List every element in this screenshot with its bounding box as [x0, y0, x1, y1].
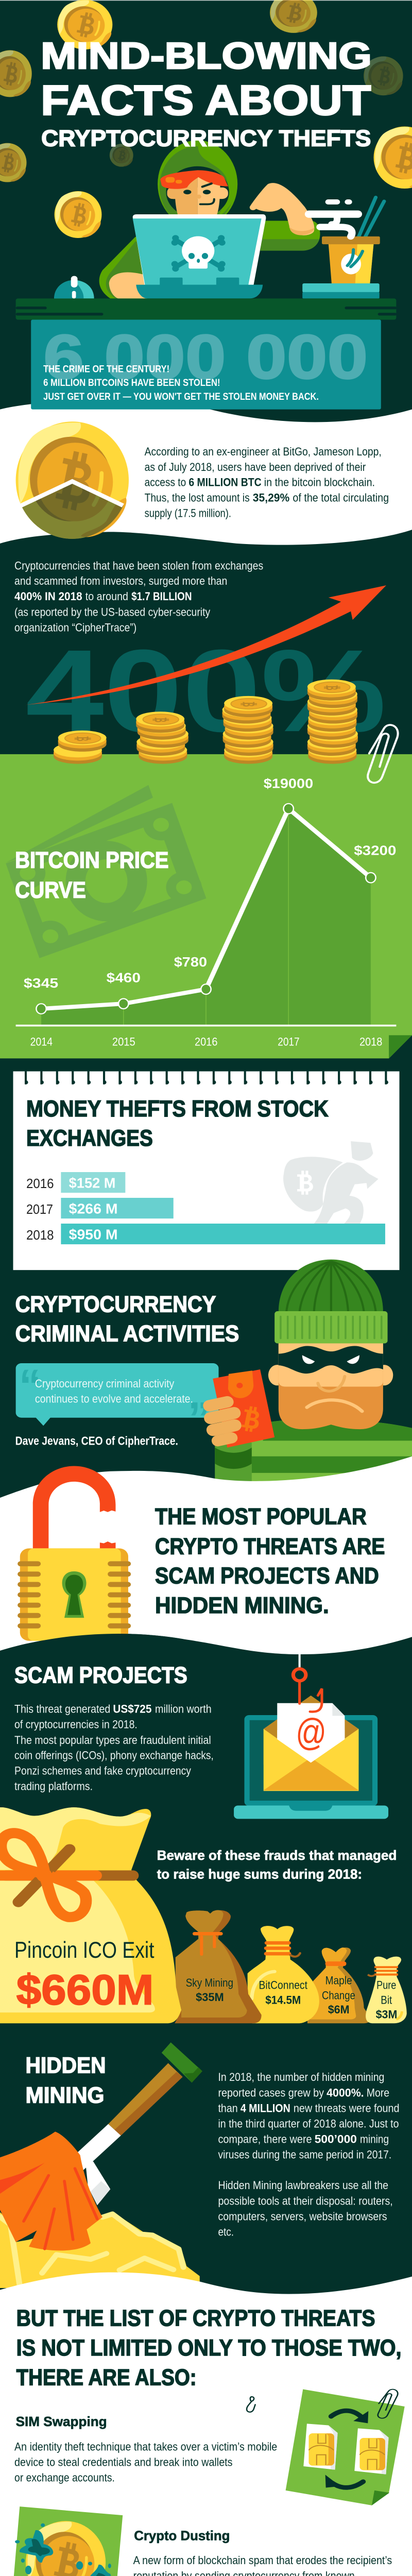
- heading: hidden mining: MINING: [25, 2083, 105, 2108]
- white wave: popular threats band: [0, 1456, 412, 1654]
- icon: small hook: [247, 2397, 255, 2412]
- callout: quote: [16, 1360, 218, 1444]
- bag: Maple Change: [307, 1947, 371, 2023]
- icon: wallet in fist: [202, 1369, 274, 1448]
- title: CRYPTOCURRENCY THEFTS: [41, 126, 371, 151]
- text: hidden mining body: than: [218, 2102, 238, 2115]
- text: lost bitcoin: Thus, the lost amount is: [145, 492, 250, 504]
- bag labels: $3M: [376, 2008, 397, 2021]
- text: hidden mining body: 4 MILLION: [241, 2102, 290, 2115]
- callout: quote: continues to evolve and accelerate.: [35, 1393, 193, 1405]
- sticky: crypto dusting: [11, 2506, 123, 2576]
- text: stolen cryptocurrencies: [14, 560, 263, 634]
- callout: crime text: JUST GET OVER IT — YOU WON'T GET THE STOLEN MONEY BACK.: [43, 391, 319, 402]
- text: crypto dusting: Crypto Dusting: [134, 2528, 230, 2543]
- heading: criminal activities: CRYPTOCURRENCY: [15, 1292, 216, 1317]
- title: [41, 36, 372, 151]
- callout: quote: “: [19, 1360, 41, 1412]
- bar chart: thefts by year: $266 M: [69, 1201, 118, 1217]
- panel: green price curve: [0, 754, 412, 1058]
- text: stolen cryptocurrencies: 400% IN 2018: [14, 590, 82, 603]
- bag labels: Change: [322, 1989, 355, 2002]
- chart value labels: [24, 776, 396, 991]
- bag labels: Bit: [381, 1994, 392, 2007]
- title: FACTS ABOUT: [41, 77, 371, 124]
- heading: most popular threats: HIDDEN MINING.: [155, 1593, 329, 1618]
- text: hidden mining body: compare, there were: [218, 2133, 312, 2146]
- bag labels: Pure: [376, 1979, 396, 1992]
- text: scam projects body: US$725: [113, 1703, 151, 1716]
- robber illustration: [215, 1260, 412, 1496]
- text: scam projects body: coin offerings (ICOs), phony exchange hacks,: [14, 1749, 214, 1762]
- threats section: [0, 1456, 412, 1806]
- text: stolen cryptocurrencies: (as reported by the US-based cyber-security: [14, 606, 210, 619]
- bag: Pincoin ICO Exit: $660M: [16, 1966, 153, 2013]
- icon: mining hammer and hand: [0, 2042, 202, 2250]
- panel: notepad: [13, 1071, 400, 1270]
- heading: bitcoin price curve: CURVE: [15, 877, 86, 903]
- bar chart: thefts by year: $950 M: [69, 1227, 118, 1243]
- bag labels: Sky Mining: [186, 1977, 233, 1990]
- text: scam projects body: The most popular types are fraudulent initial: [14, 1734, 211, 1747]
- desk: [16, 298, 397, 319]
- callout: quote: ”: [188, 1393, 210, 1444]
- text: crypto dusting: [133, 2528, 392, 2576]
- chart value labels: $460: [107, 970, 141, 985]
- bar chart: thefts by year: 2018: [26, 1228, 54, 1243]
- line chart: bitcoin price: [16, 804, 396, 1026]
- heading: hidden mining: HIDDEN: [25, 2053, 106, 2078]
- text: hidden mining body: 4000%.: [327, 2087, 364, 2099]
- icon: money bill watermark: [6, 785, 207, 958]
- chart year labels: 2014: [30, 1036, 53, 1048]
- text: SIM swapping: or exchange accounts.: [14, 2471, 115, 2484]
- hero section: [0, 0, 412, 410]
- bag labels: Maple: [325, 1974, 352, 1987]
- heading: list of threats: THERE ARE ALSO:: [16, 2365, 197, 2391]
- text: beware frauds: [157, 1848, 397, 1882]
- text: lost bitcoin: [145, 445, 389, 520]
- bag: Pincoin ICO Exit: [0, 1807, 181, 2023]
- icon: phishing email on monitor: [244, 1654, 377, 1806]
- bag: Sky Mining: [175, 1910, 262, 2023]
- chart year labels: 2015: [112, 1036, 135, 1048]
- text: hidden mining body: mining: [360, 2133, 389, 2146]
- icon: padlock: [0, 1466, 184, 1661]
- title: MIND-BLOWING: [41, 36, 372, 77]
- heading: scam projects: SCAM PROJECTS: [14, 1663, 187, 1688]
- big 400% watermark: 400%: [25, 625, 386, 756]
- hacker illustration: [99, 140, 320, 298]
- money thefts section: [13, 1071, 412, 1496]
- chart year labels: 2018: [359, 1036, 382, 1048]
- icon: gold pile: [0, 2212, 200, 2288]
- text: scam projects body: of cryptocurrencies in 2018.: [14, 1718, 138, 1731]
- icon: broken coin: [16, 421, 129, 539]
- icon: coffee cup on books: [302, 197, 384, 298]
- bar chart: thefts by year: 2016: [26, 1176, 54, 1191]
- heading: list of threats: [16, 2306, 402, 2391]
- callout: crime text: 6 MILLION BITCOINS HAVE BEEN STOLEN!: [43, 377, 220, 388]
- text: stolen cryptocurrencies: organization “CipherTrace”): [14, 621, 136, 634]
- monitor base: [234, 1805, 388, 1819]
- chart value labels: $780: [174, 955, 207, 969]
- text: scam projects body: This threat generated: [14, 1703, 110, 1716]
- white wave: threats list band: [0, 2273, 412, 2576]
- chart value labels: $19000: [264, 776, 313, 791]
- text: SIM swapping: [14, 2414, 277, 2484]
- text: SIM swapping: device to steal credentials and break into wallets: [14, 2456, 233, 2469]
- heading: money thefts: MONEY THEFTS FROM STOCK: [26, 1096, 329, 1122]
- icon: paperclip: [368, 725, 398, 783]
- bag: Pincoin ICO Exit: Pincoin ICO Exit: [14, 1938, 154, 1963]
- text: SIM swapping: SIM Swapping: [16, 2414, 107, 2429]
- text: stolen cryptocurrencies: and scammed from investors, surged more than: [14, 575, 227, 588]
- text: beware frauds: to raise huge sums during 2018:: [157, 1867, 362, 1882]
- hammer and gold section: [0, 2042, 412, 2576]
- white wave: intro band: [0, 400, 412, 545]
- icon: floating bitcoins: [0, 0, 412, 238]
- callout: crime text: [43, 364, 319, 402]
- text: stolen cryptocurrencies: Cryptocurrencies that have been stolen from exchanges: [14, 560, 263, 572]
- bag labels: $35M: [196, 1991, 224, 2004]
- bar chart: thefts by year: 2017: [26, 1202, 53, 1217]
- text: hidden mining body: More: [367, 2087, 389, 2099]
- heading: most popular threats: [155, 1504, 385, 1618]
- text: hidden mining tools: etc.: [218, 2226, 234, 2239]
- text: hidden mining tools: [218, 2179, 393, 2239]
- text: hidden mining body: reported cases grew by: [218, 2087, 324, 2099]
- heading: bitcoin price curve: BITCOIN PRICE: [15, 848, 169, 873]
- heading: criminal activities: CRIMINAL ACTIVITIES: [15, 1321, 239, 1347]
- icon: bitcoin coin stacks: [54, 680, 358, 764]
- sticky: SIM swap: [286, 2389, 405, 2505]
- icon: skull laptop: [133, 214, 266, 298]
- heading: hidden mining: [25, 2053, 106, 2108]
- bitcoin price section: [0, 680, 412, 1058]
- bar chart: thefts by year: [26, 1172, 385, 1244]
- callout: quote: Cryptocurrency criminal activity: [35, 1377, 174, 1390]
- text: lost bitcoin: access to: [145, 476, 186, 489]
- text: hidden mining body: 500’000: [315, 2133, 357, 2146]
- text: lost bitcoin: supply (17.5 million).: [145, 507, 231, 520]
- bag labels: [186, 1974, 397, 2021]
- text: scam projects body: trading platforms.: [14, 1780, 93, 1793]
- quote author: Dave Jevans, CEO of CipherTrace.: [15, 1434, 178, 1448]
- bar chart: thefts by year: $152 M: [69, 1175, 115, 1191]
- steam: [309, 202, 358, 236]
- bag labels: BitConnect: [259, 1979, 307, 1992]
- text: scam projects body: Ponzi schemes and fake cryptocurrency: [14, 1765, 191, 1777]
- bag labels: $14.5M: [265, 1994, 301, 2007]
- heading: money thefts: [26, 1096, 329, 1151]
- icon: mouse: [54, 276, 94, 298]
- callout: crime text: THE CRIME OF THE CENTURY!: [43, 364, 169, 375]
- heading: bitcoin price curve: [15, 848, 169, 903]
- frauds section: [0, 1805, 407, 2161]
- chart value labels: $345: [24, 976, 58, 991]
- chart year labels: [30, 1036, 382, 1048]
- text: stolen cryptocurrencies: $1.7 BILLION: [131, 590, 192, 603]
- chart year labels: 2016: [195, 1036, 217, 1048]
- text: SIM swapping: An identity theft technique that takes over a victim’s mobile: [14, 2441, 277, 2453]
- text: hidden mining body: [218, 2071, 400, 2161]
- bag: Pure Bit: [366, 1957, 407, 2023]
- bag: BitConnect: [248, 1926, 319, 2023]
- icon: thief watermark: [283, 1141, 379, 1224]
- heading: money thefts: EXCHANGES: [26, 1126, 153, 1151]
- threats list section: [10, 2506, 405, 2576]
- text: lost bitcoin: 35,29%: [253, 492, 289, 504]
- bag labels: $6M: [328, 2003, 350, 2016]
- panel: crime of the century: 6 000 000: [43, 321, 368, 392]
- text: stolen cryptocurrencies: to around: [85, 590, 128, 603]
- text: lost bitcoin: 6 MILLION BTC: [188, 476, 262, 489]
- text: lost bitcoin: in the bitcoin blockchain.: [264, 476, 375, 489]
- icon: phishing email on monitor: @: [296, 1710, 327, 1753]
- heading: criminal activities: [15, 1292, 239, 1347]
- chart value labels: $3200: [354, 843, 396, 858]
- text: scam projects body: million worth: [155, 1703, 212, 1716]
- arrow: rising: [26, 585, 386, 705]
- text: scam projects body: [14, 1703, 214, 1793]
- intro section: [14, 364, 389, 756]
- chart year labels: 2017: [278, 1036, 300, 1048]
